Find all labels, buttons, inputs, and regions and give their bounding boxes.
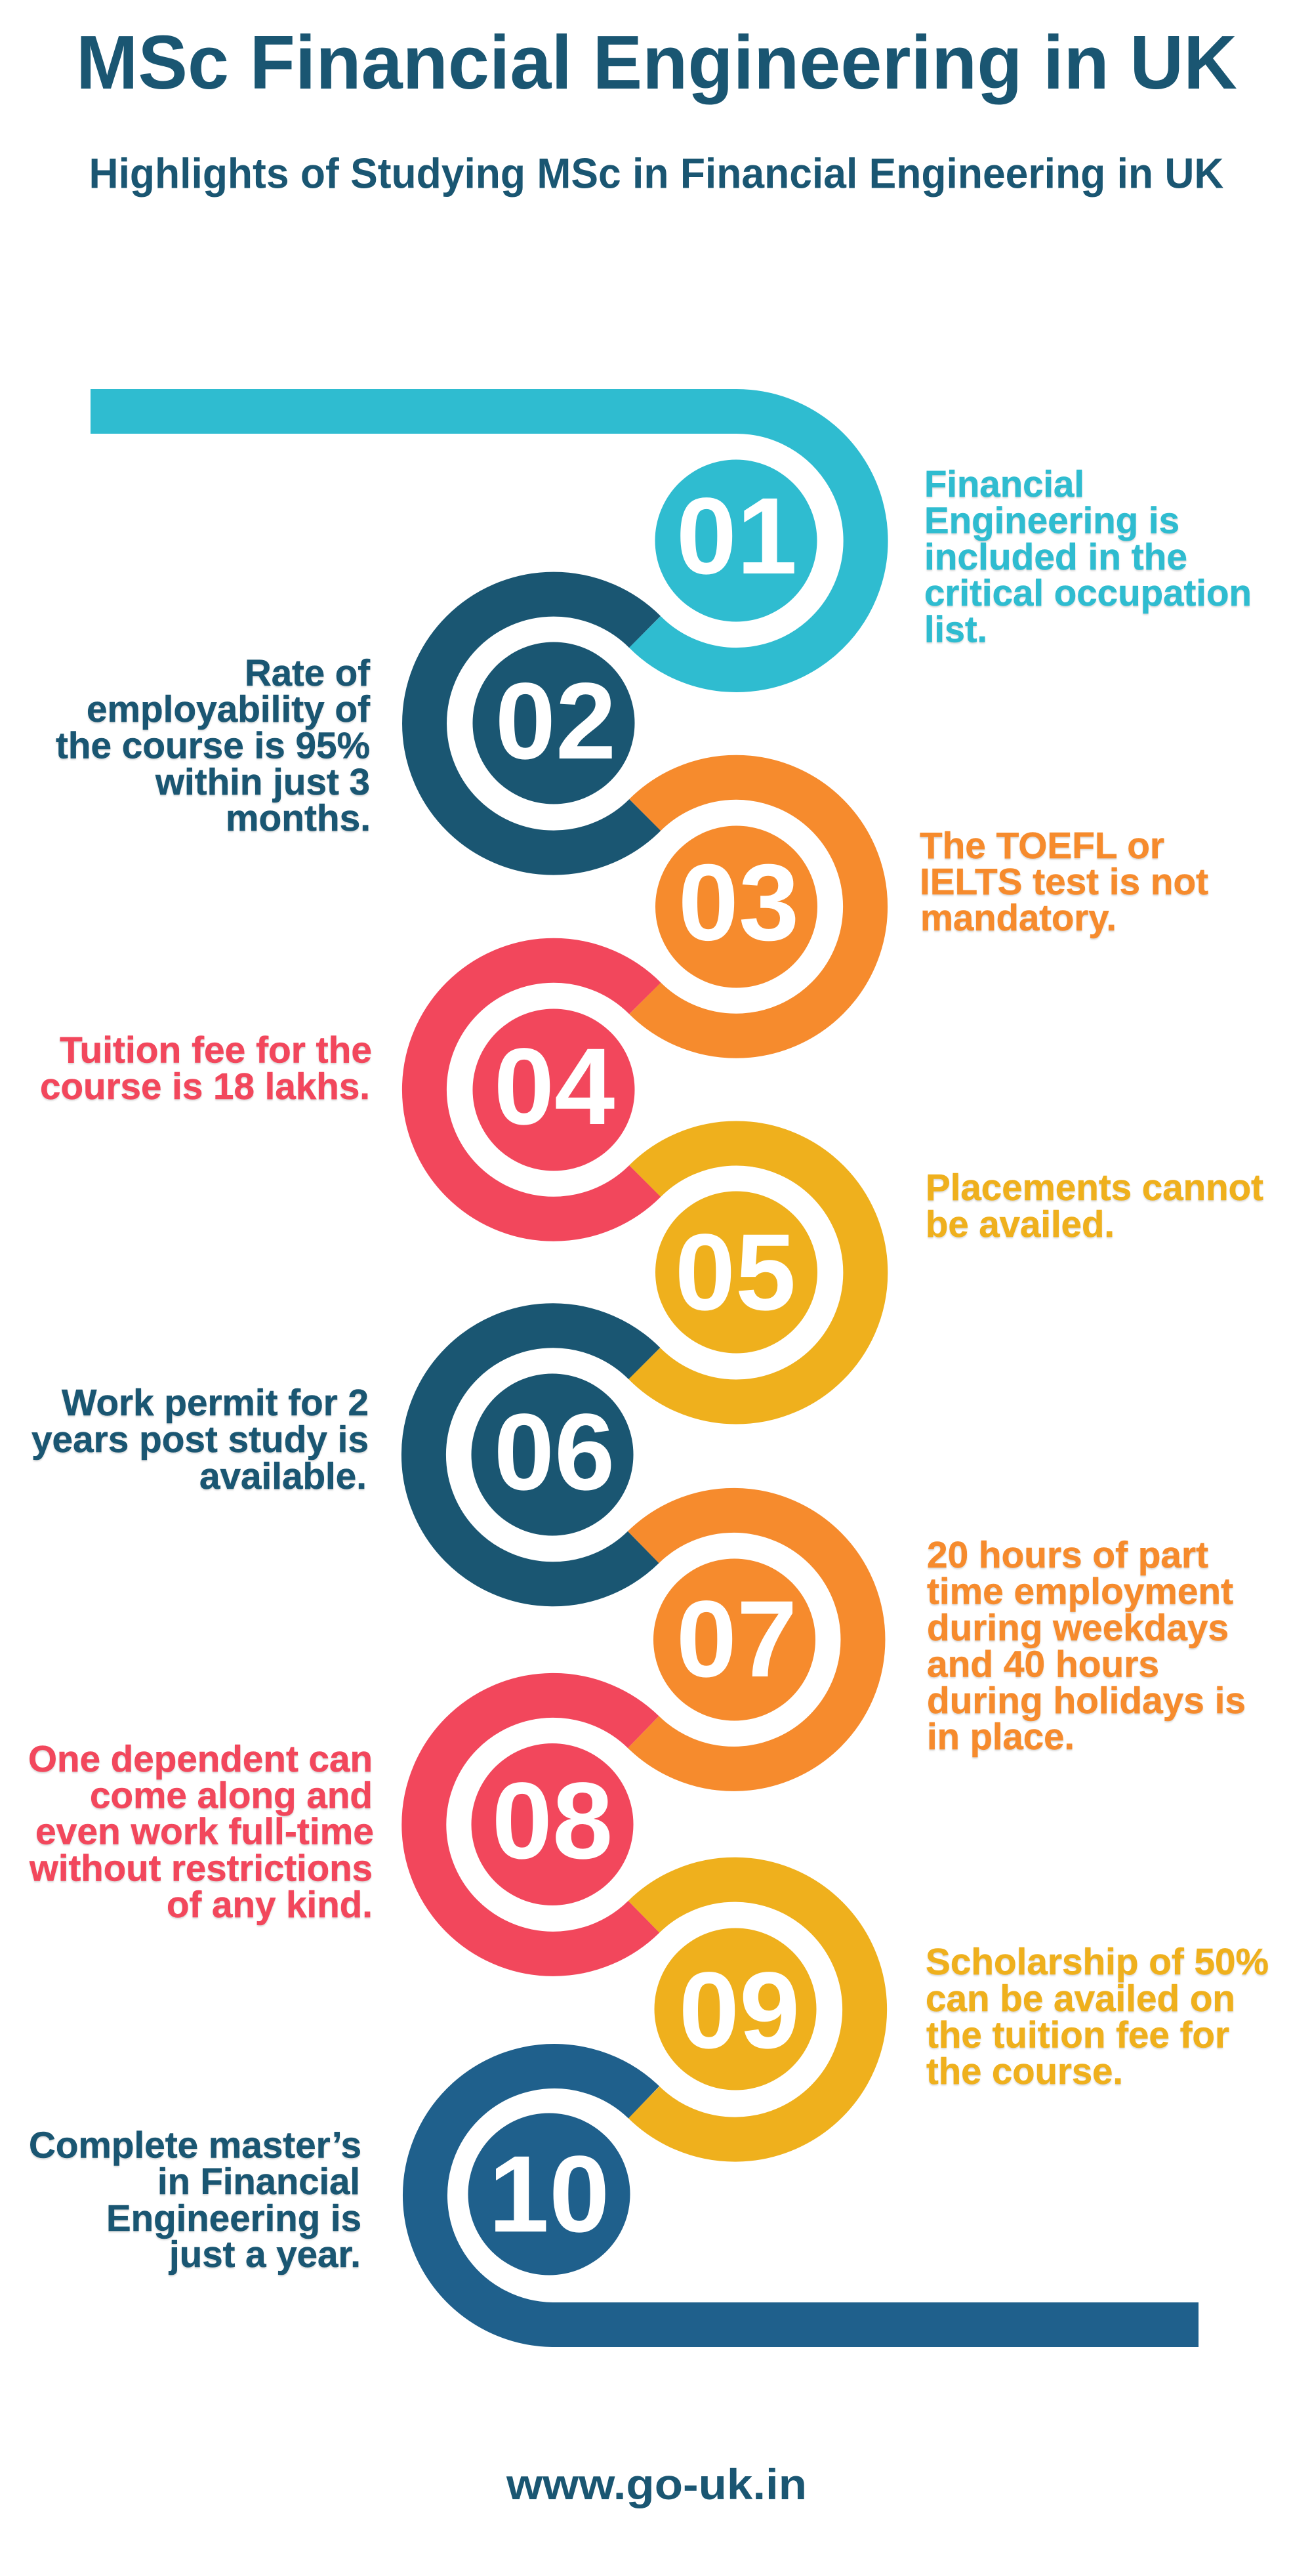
step 10 xyxy=(29,2066,1199,2325)
ring 02 xyxy=(424,594,645,853)
number 07: 07 xyxy=(676,1579,797,1700)
number 03: 03 xyxy=(678,842,799,963)
caption 09: can be availed on xyxy=(926,1978,1235,2020)
caption 07: during weekdays xyxy=(927,1607,1229,1649)
ring 04 xyxy=(424,961,645,1219)
caption 05: be availed. xyxy=(926,1203,1115,1245)
caption 07: in place. xyxy=(927,1716,1075,1758)
disc 01 xyxy=(655,459,817,622)
caption 02: Rate of xyxy=(245,652,371,694)
caption 06 xyxy=(31,1382,369,1497)
disc 06 xyxy=(471,1374,634,1535)
caption 10 xyxy=(29,2125,361,2275)
subtitle: Highlights of Studying MSc in Financial Engineering in UK xyxy=(89,150,1224,197)
caption 10: Engineering is xyxy=(106,2197,361,2239)
disc 02 xyxy=(472,642,635,804)
disc 10 xyxy=(468,2113,630,2275)
caption 04 xyxy=(40,1029,372,1108)
disc 03 xyxy=(655,825,817,988)
caption 01: Financial xyxy=(924,463,1084,505)
caption 02: employability of xyxy=(87,688,371,730)
ring 08 xyxy=(424,1695,644,1954)
caption 08 xyxy=(28,1738,374,1926)
step 03 xyxy=(645,778,1208,1036)
caption 08: even work full-time xyxy=(35,1811,374,1853)
number 10: 10 xyxy=(489,2134,609,2255)
caption 01: Engineering is xyxy=(924,500,1179,542)
caption 05: Placements cannot xyxy=(926,1167,1263,1209)
number 01: 01 xyxy=(676,476,797,597)
disc 07 xyxy=(653,1559,815,1720)
caption 02 xyxy=(56,652,371,839)
number 09: 09 xyxy=(679,1950,800,2071)
caption 06: years post study is xyxy=(31,1419,369,1461)
caption 10: just a year. xyxy=(169,2233,361,2275)
number 05: 05 xyxy=(675,1212,796,1333)
step 08 xyxy=(28,1695,644,1954)
caption 07: time employment xyxy=(927,1571,1233,1613)
disc 04 xyxy=(472,1009,635,1171)
caption 03: mandatory. xyxy=(920,897,1117,939)
step 01 xyxy=(91,411,1252,670)
ring 05 xyxy=(644,1144,865,1402)
caption 09 xyxy=(926,1941,1269,2092)
disc 08 xyxy=(471,1743,634,1905)
caption 02: within just 3 xyxy=(155,761,370,803)
disc 09 xyxy=(655,1928,816,2090)
ring 07 xyxy=(644,1510,863,1769)
caption 10: Complete master’s xyxy=(29,2125,361,2167)
title: MSc Financial Engineering in UK xyxy=(76,20,1237,105)
step 09 xyxy=(644,1880,1269,2140)
caption 01: list. xyxy=(924,609,987,651)
caption 09: the tuition fee for xyxy=(926,2014,1229,2056)
caption 07: during holidays is xyxy=(927,1680,1246,1722)
caption 08: without restrictions xyxy=(29,1848,373,1890)
number 04: 04 xyxy=(494,1026,615,1148)
caption 04: Tuition fee for the xyxy=(60,1029,372,1071)
caption 08: come along and xyxy=(90,1774,373,1816)
caption 03 xyxy=(920,825,1208,939)
caption 02: months. xyxy=(226,797,371,839)
number 02: 02 xyxy=(495,661,616,782)
number 06: 06 xyxy=(494,1392,615,1513)
caption 03: The TOEFL or xyxy=(920,825,1164,867)
caption 10: in Financial xyxy=(157,2161,360,2203)
caption 08: One dependent can xyxy=(28,1738,373,1780)
caption 06: Work permit for 2 xyxy=(62,1382,369,1424)
caption 03: IELTS test is not xyxy=(920,861,1208,903)
ring 09 xyxy=(644,1880,865,2140)
caption 09: Scholarship of 50% xyxy=(926,1941,1269,1983)
footer website: www.go-uk.in xyxy=(506,2460,807,2508)
caption 01: included in the xyxy=(924,536,1187,578)
disc 05 xyxy=(655,1192,817,1353)
caption 09: the course. xyxy=(926,2050,1123,2092)
caption 01: critical occupation xyxy=(924,572,1252,614)
caption 02: the course is 95% xyxy=(56,724,370,766)
number 08: 08 xyxy=(492,1760,613,1882)
step 04 xyxy=(40,961,645,1219)
ring and top bar 01 xyxy=(91,411,866,670)
caption 06: available. xyxy=(199,1455,367,1497)
caption 07 xyxy=(927,1534,1246,1758)
ring 03 xyxy=(645,778,865,1036)
ring and bottom bar 10 xyxy=(425,2066,1199,2325)
step 02 xyxy=(56,594,645,853)
caption 05 xyxy=(926,1167,1263,1245)
ring 06 xyxy=(424,1325,644,1584)
step 06 xyxy=(31,1325,644,1584)
caption 04: course is 18 lakhs. xyxy=(40,1066,370,1108)
step 05 xyxy=(644,1144,1263,1402)
caption 01 xyxy=(924,463,1252,651)
caption 08: of any kind. xyxy=(167,1884,373,1926)
caption 07: 20 hours of part xyxy=(927,1534,1208,1576)
caption 07: and 40 hours xyxy=(927,1643,1159,1685)
step 07 xyxy=(644,1510,1246,1769)
